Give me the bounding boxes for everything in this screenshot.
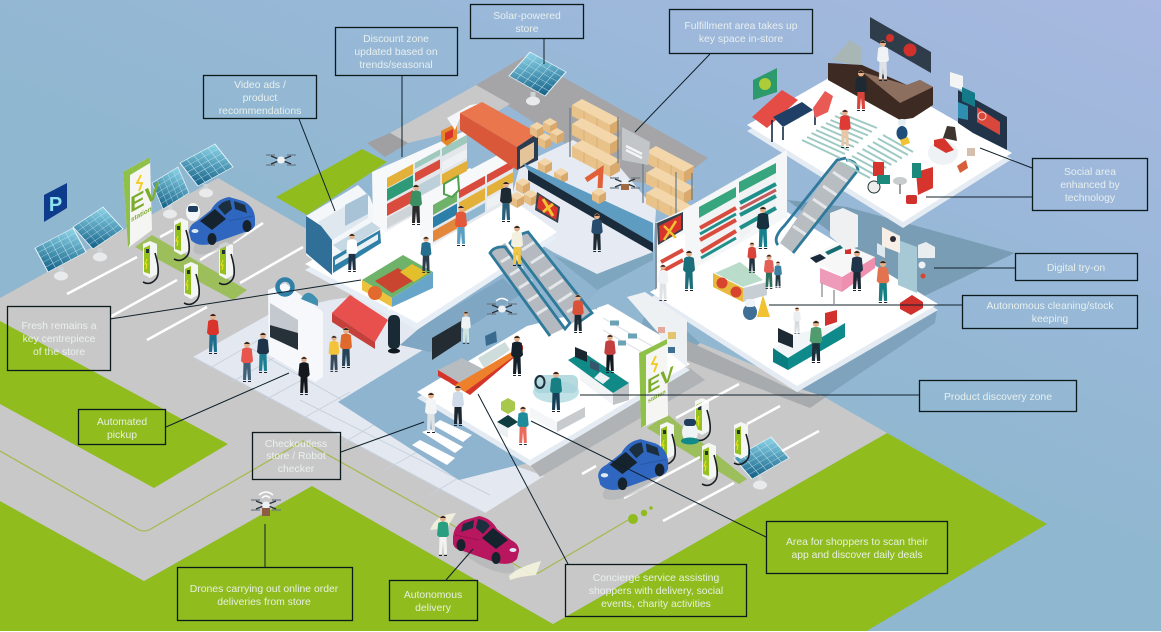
label: fresh centrepiece: of the store bbox=[33, 347, 85, 358]
label: drones: Drones carrying out online order bbox=[190, 584, 339, 595]
floor: right fashion store bbox=[650, 212, 938, 392]
label: fulfillment area: key space in-store bbox=[699, 34, 783, 45]
label: solar-powered store: store bbox=[515, 24, 539, 35]
label: concierge service: Concierge service assisting bbox=[593, 573, 719, 584]
label: discount zone: Discount zone bbox=[363, 34, 429, 45]
robot: mezzanine helper bbox=[896, 119, 910, 146]
label: social area: Social area bbox=[1064, 167, 1116, 178]
sensor arcs: autonomous car bbox=[430, 513, 541, 580]
label: autonomous cleaning: Autonomous cleaning/stock bbox=[986, 301, 1114, 312]
label: area for shoppers bbox=[766, 522, 948, 574]
icon: parking sign: P bbox=[49, 194, 62, 216]
drone: over escalator bbox=[487, 298, 517, 314]
mezzanine furniture bbox=[753, 17, 933, 120]
pedestal: discovery bbox=[530, 407, 585, 432]
desk: teal till bbox=[773, 310, 845, 370]
steps at entrance bbox=[412, 420, 472, 465]
drone in warehouse bbox=[610, 178, 640, 190]
label: concierge service: events, charity activities bbox=[601, 599, 711, 610]
shadow: under warehouse and mezzanine bbox=[400, 200, 1015, 477]
hologram: product discovery bbox=[533, 375, 579, 403]
robot: cleaning bbox=[743, 295, 770, 320]
label: discount zone bbox=[336, 28, 458, 76]
label: product discovery zone: Product discovery zone bbox=[944, 392, 1052, 403]
robot charging left bbox=[186, 203, 200, 221]
label: video ads: Video ads / bbox=[234, 80, 286, 91]
label: video ads bbox=[204, 76, 316, 118]
rugs: striped bbox=[802, 113, 913, 178]
label: fulfillment area bbox=[670, 10, 812, 54]
label: digital try-on bbox=[1016, 254, 1138, 280]
ev station right: EV bbox=[647, 361, 674, 399]
sign on warehouse wall bbox=[622, 127, 650, 165]
label: area for shoppers: app and discover daily deals bbox=[791, 550, 923, 561]
parking bays left bbox=[67, 223, 303, 340]
table: pink bbox=[808, 242, 875, 304]
floor: main fresh store bbox=[305, 168, 557, 330]
truck: white cab bbox=[447, 103, 483, 130]
shelves: discount zone bbox=[372, 123, 467, 233]
escalator: upper right bbox=[776, 158, 858, 253]
people bbox=[207, 40, 889, 556]
conveyor belt bbox=[523, 163, 653, 252]
label: autonomous delivery bbox=[390, 580, 478, 620]
pedestal: scan deals bbox=[497, 398, 518, 438]
label: social area: enhanced by bbox=[1060, 180, 1121, 191]
label: discount zone: trends/seasonal bbox=[359, 60, 433, 71]
robot arm bbox=[586, 170, 601, 188]
label: autonomous delivery: delivery bbox=[415, 603, 452, 614]
panel: digital try-on bbox=[877, 227, 935, 293]
sofa: red mezzanine bbox=[752, 90, 815, 142]
lawn: behind store bbox=[276, 149, 387, 215]
wifi kiosk and speaker bbox=[388, 307, 402, 354]
walkway: pickup pavement bbox=[193, 290, 544, 513]
floor: mezzanine social bbox=[747, 63, 1012, 228]
label: checkoutless store: Checkoutless bbox=[265, 439, 327, 450]
drone: delivery with parcel bbox=[251, 492, 281, 516]
warehouse racks with boxes bbox=[530, 99, 694, 224]
drone: roaming bbox=[266, 155, 296, 165]
label: autonomous cleaning: keeping bbox=[1032, 314, 1068, 325]
label: fulfillment area: Fulfillment area takes up bbox=[684, 21, 798, 32]
label: social area bbox=[1032, 158, 1148, 210]
label: product discovery zone bbox=[920, 380, 1076, 412]
ev station left: station bbox=[131, 205, 152, 224]
ev station left bbox=[123, 157, 247, 304]
floor: checkout and discovery bbox=[417, 309, 690, 466]
label: automated pickup: pickup bbox=[107, 430, 137, 441]
ev station right bbox=[639, 339, 749, 485]
label: fresh centrepiece: key centrepiece bbox=[23, 334, 96, 345]
delivery route line bbox=[0, 441, 653, 574]
icon: parking sign bbox=[44, 183, 67, 222]
bottom edge strip bbox=[0, 631, 1161, 632]
table: fresh produce bbox=[362, 255, 433, 307]
kiosk: automated pickup bbox=[268, 280, 323, 382]
warehouse pad: rear gray bbox=[367, 56, 708, 186]
fridge: white bbox=[830, 208, 858, 250]
container: orange truck bbox=[460, 102, 538, 170]
leader lines bbox=[110, 38, 1032, 580]
label: checkoutless store: store / Robot bbox=[266, 451, 326, 462]
seat: reader bbox=[813, 91, 833, 118]
label: fresh centrepiece: Fresh remains a bbox=[21, 321, 97, 332]
label: social area: technology bbox=[1065, 193, 1116, 204]
label: video ads: recommendations bbox=[219, 106, 301, 117]
parking bays right bbox=[582, 384, 819, 521]
screen: discount red bbox=[535, 192, 560, 223]
table: devices bbox=[568, 347, 629, 405]
label: digital try-on: Digital try-on bbox=[1047, 263, 1105, 274]
right store wall and shelves bbox=[655, 150, 787, 295]
label: autonomous delivery: Autonomous bbox=[404, 590, 462, 601]
shelving: accessory wall bbox=[597, 292, 687, 378]
solar panels bbox=[35, 52, 789, 490]
label: concierge service: shoppers with delivery, social bbox=[589, 586, 723, 597]
floor: warehouse bbox=[505, 140, 656, 274]
lawn: bottom bbox=[0, 433, 1047, 632]
pile: boxes by screen bbox=[510, 178, 538, 208]
label: area for shoppers: Area for shoppers to scan their bbox=[786, 537, 929, 548]
label: solar-powered store: Solar-powered bbox=[493, 11, 561, 22]
label: checkoutless store: checker bbox=[278, 464, 315, 475]
car: magenta delivery bbox=[451, 516, 519, 580]
label: autonomous cleaning bbox=[962, 296, 1138, 328]
label: drones: deliveries from store bbox=[217, 597, 311, 608]
ev station left: EV bbox=[130, 178, 160, 219]
recess: blue floor by checkout bbox=[338, 237, 600, 480]
label: fresh centrepiece bbox=[8, 306, 110, 370]
ground: parking and road bbox=[0, 178, 887, 624]
label: solar-powered store bbox=[470, 4, 584, 38]
label: concierge service bbox=[566, 564, 746, 616]
label: automated pickup: Automated bbox=[97, 417, 147, 428]
pouf seating bbox=[928, 126, 975, 173]
escalators: center bbox=[490, 232, 592, 336]
shelves: second aisle bbox=[419, 150, 513, 247]
table and wheelchair bbox=[868, 162, 933, 204]
unit: video ad fridge bbox=[306, 185, 381, 275]
lawn: upper left bbox=[0, 321, 228, 488]
counter: checkout bbox=[432, 321, 523, 395]
car: blue right bbox=[598, 439, 671, 507]
tv: gaming wall bbox=[950, 72, 1007, 150]
label: discount zone: updated based on bbox=[354, 47, 438, 58]
label: checkoutless store bbox=[252, 432, 340, 480]
label: automated pickup bbox=[78, 410, 166, 444]
table: yellow display bbox=[713, 262, 767, 302]
car: blue left bbox=[189, 197, 257, 261]
ev station right: station bbox=[648, 388, 666, 405]
sofa: red lounge bbox=[332, 295, 388, 349]
robot: charging right bbox=[681, 419, 699, 444]
label: drones bbox=[178, 568, 352, 620]
label: video ads: product bbox=[243, 93, 277, 104]
device: red scale bbox=[900, 295, 923, 315]
